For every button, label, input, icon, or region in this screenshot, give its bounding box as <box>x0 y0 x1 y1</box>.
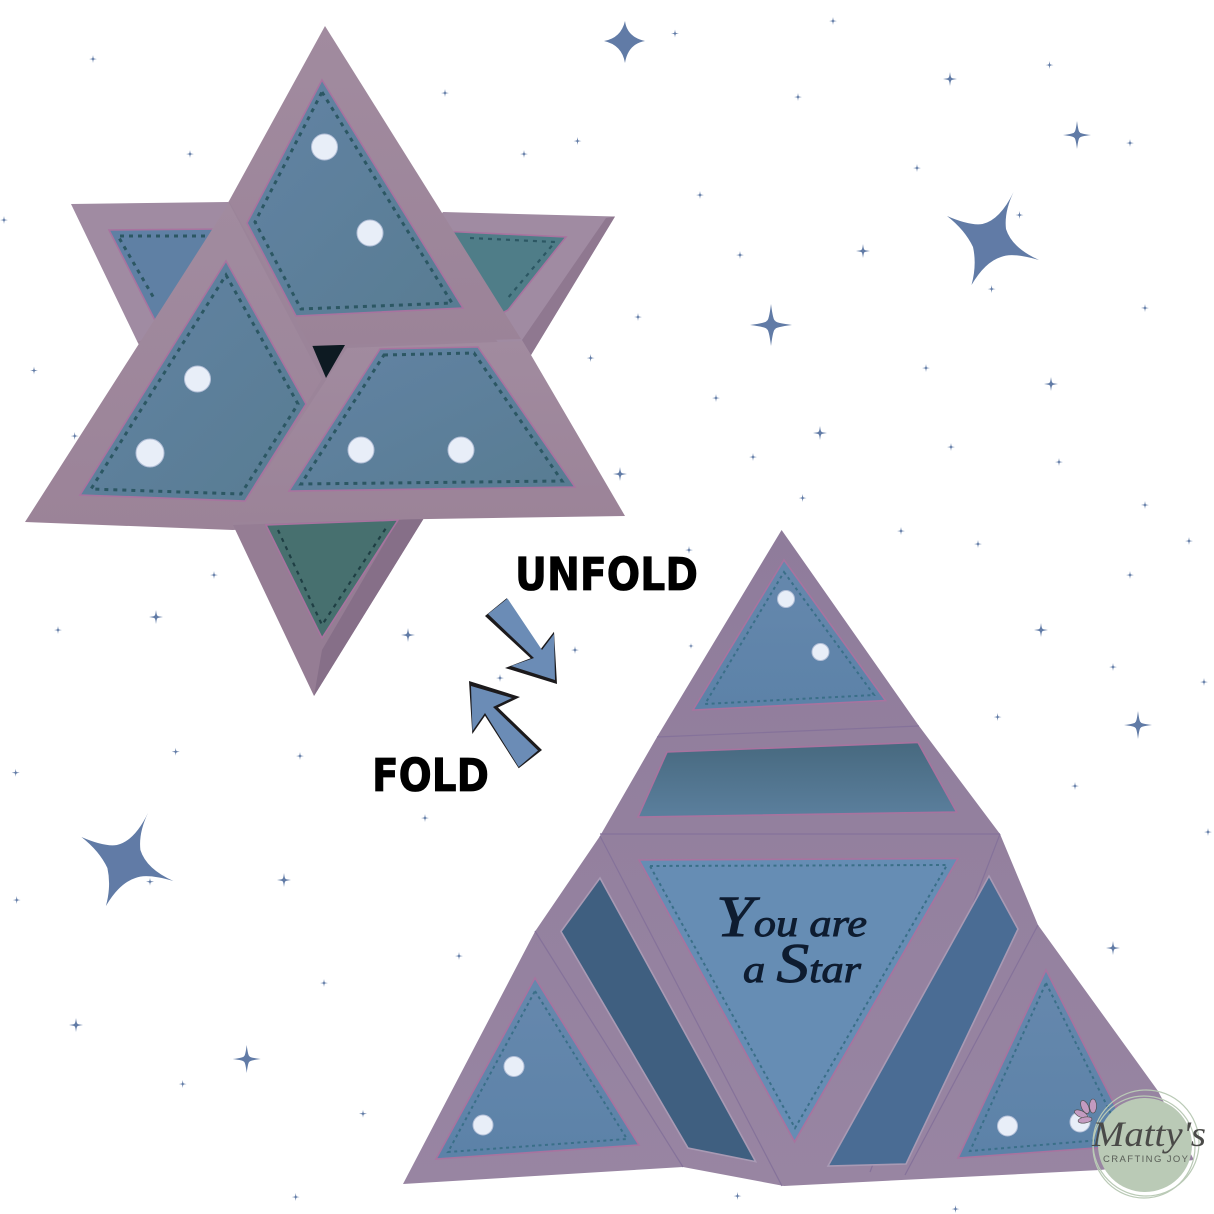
card base <box>403 530 1194 1186</box>
sentiment: You are a Star <box>716 884 867 995</box>
gem <box>812 644 829 660</box>
logo tagline: CRAFTING JOY <box>1103 1154 1189 1165</box>
gem <box>998 1116 1018 1136</box>
right triangle panel <box>958 970 1135 1158</box>
left triangle <box>25 203 322 530</box>
left triangle panel <box>436 978 639 1159</box>
gem <box>504 1056 524 1076</box>
right band panel <box>828 876 1018 1166</box>
right triangle <box>233 341 625 522</box>
back point: upper right <box>420 212 615 355</box>
upper band panel <box>638 742 957 817</box>
logo name: Matty's <box>1091 1114 1206 1154</box>
centre triangle panel <box>639 858 958 1142</box>
folded star card <box>25 26 625 696</box>
arrow: fold <box>469 681 542 768</box>
unfolded triangle card <box>403 530 1194 1186</box>
back point: bottom <box>233 518 424 696</box>
back point: upper left <box>71 202 300 341</box>
logo: Matty's Crafting Joy <box>1073 1090 1206 1198</box>
fold lines <box>535 726 1038 1186</box>
logo flower <box>1073 1099 1096 1124</box>
gem <box>348 437 374 463</box>
sentiment: You are a Star: You are <box>716 884 867 949</box>
top triangle panel <box>693 560 886 710</box>
gem <box>1070 1112 1090 1132</box>
gem <box>357 220 383 246</box>
gem <box>312 134 338 160</box>
sentiment: You are a Star: a Star <box>743 933 861 995</box>
centre gap <box>312 345 345 378</box>
label: FOLD: FOLD <box>372 749 489 802</box>
arrow: unfold <box>485 598 557 684</box>
gem <box>778 590 794 608</box>
label: UNFOLD: UNFOLD <box>515 548 698 601</box>
gem <box>473 1115 493 1135</box>
star backing <box>137 201 531 530</box>
left band panel <box>561 878 756 1162</box>
top triangle <box>229 26 521 346</box>
gem <box>448 437 474 463</box>
gem <box>136 439 164 467</box>
gem <box>184 366 210 392</box>
